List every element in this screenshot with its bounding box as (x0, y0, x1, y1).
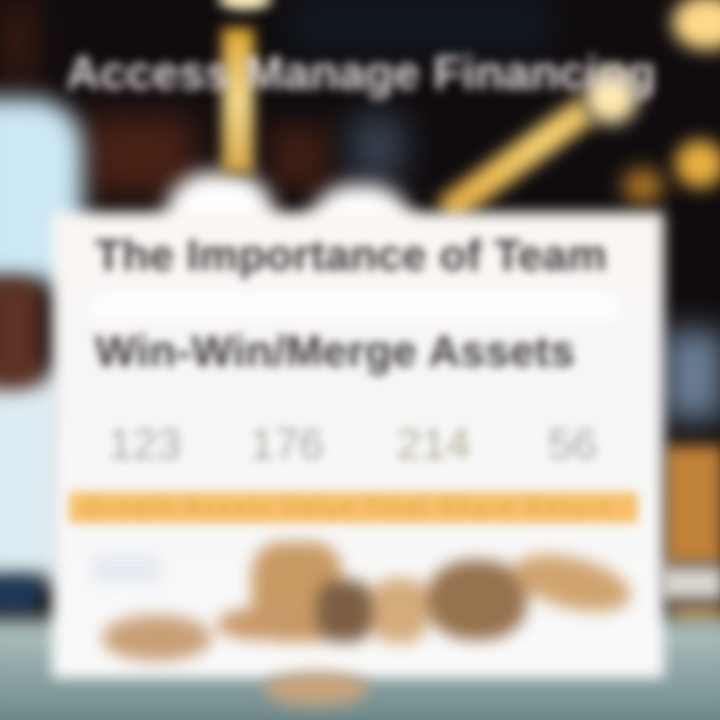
panel: white card (52, 212, 664, 678)
heading line one: The Importance of Team (95, 231, 607, 280)
top banner title: Access Manage Financing (66, 46, 656, 99)
faint left sketch (92, 555, 162, 583)
heading band (90, 293, 620, 319)
brown faces (85, 115, 195, 195)
dark blue top haze (290, 0, 550, 50)
orange highlight bar (69, 492, 638, 523)
centre stack (252, 542, 342, 642)
stat one: 123 (108, 420, 181, 469)
bokeh lights (672, 0, 720, 50)
right side figures (664, 330, 720, 420)
stat two: 176 (250, 420, 323, 469)
bottom floor (0, 618, 720, 720)
gold vertical beam (222, 28, 254, 173)
stat four: 56 (548, 420, 597, 469)
stat row (108, 420, 600, 469)
left pile (102, 615, 212, 661)
left blue figure (0, 98, 83, 283)
bottom coin (264, 672, 369, 706)
bar labels: Growth Assets Value Total Share Return (85, 495, 614, 520)
white shoulders (165, 172, 275, 242)
right pile (427, 560, 527, 640)
gold diagonal beam (436, 97, 595, 225)
heading line two: Win-Win/Merge Assets (95, 327, 575, 376)
coin piles (90, 530, 641, 716)
stat three: 214 (397, 420, 470, 469)
